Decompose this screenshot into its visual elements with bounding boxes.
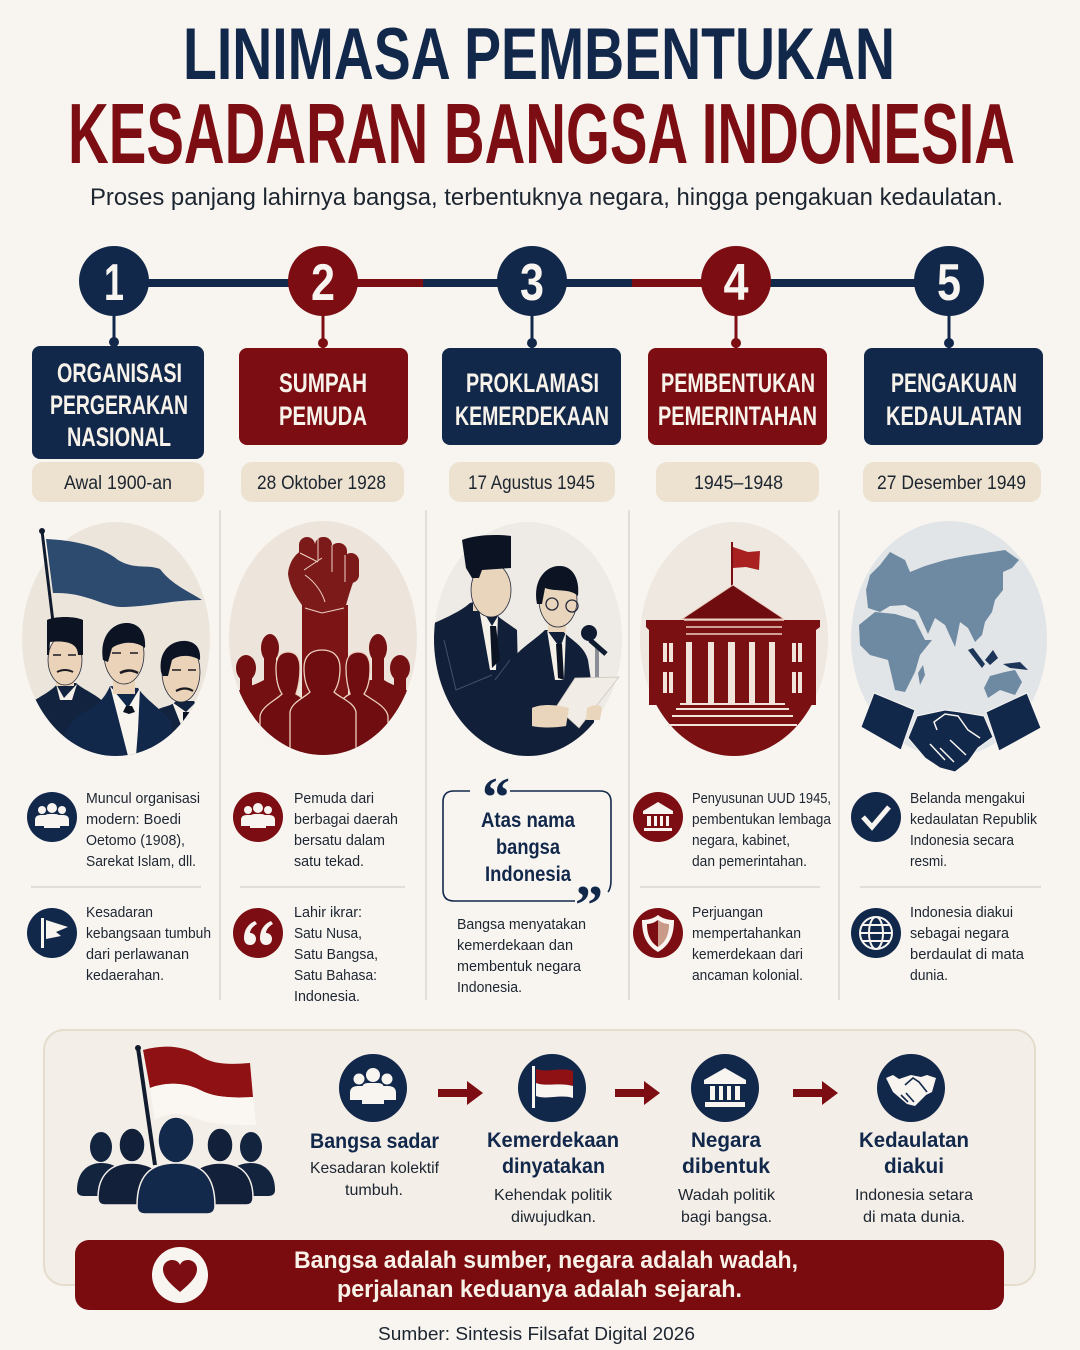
- callout: quote: ”: [575, 875, 603, 937]
- text block: column 4 item 1: negara, kabinet,: [692, 833, 790, 849]
- text block: column 1 item 1: modern: Boedi: [86, 812, 181, 828]
- text block: column 1 item 2: Kesadaran: [86, 905, 153, 921]
- step: kemerdekaan dinyatakan: diwujudkan.: [511, 1209, 596, 1226]
- callout: quote: Atas nama: [481, 809, 575, 832]
- step: kemerdekaan dinyatakan: dinyatakan: [502, 1155, 605, 1178]
- step: kemerdekaan dinyatakan: Kemerdekaan: [487, 1129, 619, 1152]
- subtitle: Proses panjang lahirnya bangsa, terbentuknya negara, hingga pengakuan kedaulatan.: [90, 184, 1003, 211]
- heading: organisasi pergerakan nasional: ORGANISASI: [57, 358, 182, 388]
- step: negara dibentuk: Wadah politik: [678, 1187, 776, 1204]
- text block: column 1 item 2: kedaerahan.: [86, 968, 164, 984]
- text block: column 4 item 1: dan pemerintahan.: [692, 854, 807, 870]
- marker 4: [701, 246, 771, 316]
- illustration: proclamation: [430, 522, 622, 760]
- heading: organisasi pergerakan nasional: PERGERAKAN: [50, 390, 188, 420]
- heading: sumpah pemuda: [239, 348, 408, 445]
- date pill 1: Awal 1900-an: [64, 473, 172, 494]
- text block: column 3: membentuk negara: [457, 959, 582, 975]
- step: kedaulatan diakui: [855, 1054, 973, 1226]
- step: kemerdekaan dinyatakan: Kehendak politik: [494, 1187, 613, 1204]
- heading: proklamasi kemerdekaan: [442, 348, 621, 445]
- text block: column 2 item 2: Satu Bangsa,: [294, 947, 378, 963]
- map: eurasia: [866, 550, 1019, 647]
- marker 1: [79, 246, 149, 316]
- heading: sumpah pemuda: SUMPAH: [279, 368, 367, 398]
- text block: column 2 item 2: Satu Nusa,: [294, 926, 362, 942]
- text block: column 1 item 2: dari perlawanan: [86, 947, 189, 963]
- date pill 3: [449, 462, 615, 502]
- text block: column 1 item 1: Oetomo (1908),: [86, 833, 185, 849]
- text block: column 5 item 2: [851, 905, 1025, 984]
- step: bangsa sadar: [310, 1054, 440, 1199]
- text block: column 1 item 1: [27, 791, 200, 870]
- text block: column 2 item 2: [233, 905, 378, 1005]
- banner: conclusion: Bangsa adalah sumber, negara adalah wadah,: [294, 1247, 798, 1274]
- text block: column 4 item 1: pembentukan lembaga: [692, 812, 832, 828]
- handshake: [861, 693, 1041, 772]
- text block: column 4 item 2: [633, 905, 803, 984]
- text block: column 2 item 1: berbagai daerah: [294, 812, 398, 828]
- title: [68, 14, 1015, 182]
- arrow: [615, 1081, 660, 1105]
- microphone: [581, 625, 606, 690]
- text block: column 2 item 1: satu tekad.: [294, 854, 364, 870]
- date pill 2: [241, 462, 404, 502]
- source: Sumber: Sintesis Filsafat Digital 2026: [378, 1324, 695, 1344]
- timeline: [79, 246, 984, 348]
- heading: pengakuan kedaulatan: KEDAULATAN: [886, 401, 1022, 431]
- step: kedaulatan diakui: Indonesia setara: [855, 1187, 973, 1204]
- step: negara dibentuk: Negara: [691, 1129, 761, 1152]
- text block: column 3: Bangsa menyatakan: [457, 917, 586, 933]
- text block: column 4 item 1: [633, 791, 832, 870]
- step: kedaulatan diakui: Kedaulatan: [859, 1129, 969, 1152]
- step: kedaulatan diakui: diakui: [884, 1155, 944, 1178]
- text block: column 1 item 2: [27, 905, 211, 984]
- text block: column 5 item 1: kedaulatan Republik: [910, 812, 1038, 828]
- icon: shield: [633, 908, 683, 958]
- marker 3: 3: [520, 254, 544, 312]
- icon: institution: [633, 792, 683, 842]
- date pill 3: 17 Agustus 1945: [468, 473, 595, 494]
- text block: column 2 item 1: Pemuda dari: [294, 791, 374, 807]
- heading: pengakuan kedaulatan: PENGAKUAN: [891, 368, 1017, 398]
- step: bangsa sadar: Bangsa sadar: [310, 1130, 439, 1153]
- heading: proklamasi kemerdekaan: PROKLAMASI: [466, 368, 599, 398]
- text block: column 4 item 2: Perjuangan: [692, 905, 763, 921]
- banner: conclusion: [75, 1240, 1004, 1310]
- text block: column 4 item 2: ancaman kolonial.: [692, 968, 803, 984]
- date pill 2: 28 Oktober 1928: [257, 473, 386, 494]
- icon: pennant: [27, 908, 77, 958]
- icon: heart: [152, 1247, 208, 1303]
- heading: pengakuan kedaulatan: [864, 348, 1043, 445]
- banner: conclusion: perjalanan keduanya adalah sejarah.: [337, 1276, 742, 1303]
- text block: column 5 item 2: Indonesia diakui: [910, 905, 1013, 921]
- date pill 1: [32, 462, 204, 502]
- arrow: [793, 1081, 838, 1105]
- crowd front row: [260, 650, 388, 760]
- panel: summary flow: [44, 1030, 1035, 1285]
- icon: people: [27, 792, 77, 842]
- heading: sumpah pemuda: PEMUDA: [279, 401, 367, 431]
- icon: people: [233, 792, 283, 842]
- callout: quote: [443, 767, 611, 937]
- callout: quote: “: [482, 767, 510, 829]
- date pill 4: 1945–1948: [694, 473, 783, 494]
- text block: column 3: [457, 917, 586, 996]
- step: negara dibentuk: dibentuk: [682, 1155, 770, 1178]
- callout: quote: bangsa: [496, 836, 560, 859]
- heading: organisasi pergerakan nasional: [32, 346, 204, 459]
- map: indonesia: [968, 648, 1028, 670]
- text block: column 2 item 2: Lahir ikrar:: [294, 905, 362, 921]
- text block: column 5 item 1: Belanda mengakui: [910, 791, 1025, 807]
- map: australia: [984, 670, 1022, 698]
- icon: quotation mark: [233, 908, 283, 958]
- heading: pembentukan pemerintahan: PEMBENTUKAN: [661, 368, 815, 398]
- text block: column 5 item 1: resmi.: [910, 854, 947, 870]
- step: kedaulatan diakui: di mata dunia.: [863, 1209, 965, 1226]
- illustration: raised fist and crowd: [225, 521, 421, 760]
- text block: column 1 item 1: Sarekat Islam, dll.: [86, 854, 196, 870]
- icon: globe: [851, 908, 901, 958]
- founder right: [150, 640, 200, 748]
- founder centre: [62, 623, 172, 760]
- step: negara dibentuk: bagi bangsa.: [681, 1209, 772, 1226]
- text block: column 5 item 2: sebagai negara: [910, 926, 1010, 942]
- text block: column 2 item 2: Indonesia.: [294, 989, 360, 1005]
- icon: check mark: [851, 792, 901, 842]
- icon: institution: [691, 1054, 759, 1122]
- text block: column 2 item 1: [233, 791, 398, 870]
- illustration: world map and handshake: [851, 521, 1047, 772]
- text block: column 3: kemerdekaan dan: [457, 938, 573, 954]
- icon: flag: [518, 1054, 586, 1122]
- illustration: flag and founders: [20, 522, 210, 760]
- step: kemerdekaan dinyatakan: [487, 1054, 619, 1226]
- text block: column 1 item 2: kebangsaan tumbuh: [86, 926, 211, 942]
- heading: pembentukan pemerintahan: [648, 348, 827, 445]
- speaker right: [512, 630, 594, 756]
- marker 4: 4: [724, 254, 749, 312]
- marker 5: [914, 246, 984, 316]
- marker 1: 1: [104, 254, 124, 312]
- date pill 4: [656, 462, 819, 502]
- date pill 5: 27 Desember 1949: [877, 473, 1026, 494]
- icon: handshake: [877, 1054, 945, 1122]
- speaker left: [430, 600, 520, 760]
- text block: column 5 item 1: Indonesia secara: [910, 833, 1015, 849]
- crowd back row: [236, 634, 410, 752]
- text block: column 4 item 2: mempertahankan: [692, 926, 801, 942]
- text block: column 2 item 1: bersatu dalam: [294, 833, 385, 849]
- founder left: [36, 617, 108, 756]
- text block: column 5 item 1: [851, 791, 1038, 870]
- heading: pembentukan pemerintahan: PEMERINTAHAN: [658, 401, 817, 431]
- date pill 5: [863, 462, 1041, 502]
- text block: column 1 item 1: Muncul organisasi: [86, 791, 200, 807]
- text block: column 5 item 2: berdaulat di mata: [910, 947, 1025, 963]
- step: bangsa sadar: Kesadaran kolektif: [310, 1160, 440, 1177]
- text block: column 3: Indonesia.: [457, 980, 522, 996]
- step: negara dibentuk: [678, 1054, 776, 1226]
- step: bangsa sadar: tumbuh.: [345, 1182, 403, 1199]
- marker 2: [288, 246, 358, 316]
- text block: column 4 item 2: kemerdekaan dari: [692, 947, 803, 963]
- icon: crowd with flag: [77, 1045, 275, 1214]
- text block: column 4 item 1: Penyusunan UUD 1945,: [692, 791, 831, 807]
- icon: people: [339, 1054, 407, 1122]
- callout: quote: Indonesia: [485, 863, 571, 886]
- marker 5: 5: [937, 254, 961, 312]
- fist: [288, 537, 359, 612]
- text block: column 2 item 2: Satu Bahasa:: [294, 968, 377, 984]
- map: africa: [859, 612, 932, 692]
- heading: organisasi pergerakan nasional: NASIONAL: [67, 422, 171, 452]
- marker 3: [497, 246, 567, 316]
- text block: column 5 item 2: dunia.: [910, 968, 948, 984]
- illustration: government building: [640, 522, 828, 760]
- arrow: [438, 1081, 483, 1105]
- heading: proklamasi kemerdekaan: KEMERDEKAAN: [455, 401, 609, 431]
- marker 2: 2: [311, 254, 335, 312]
